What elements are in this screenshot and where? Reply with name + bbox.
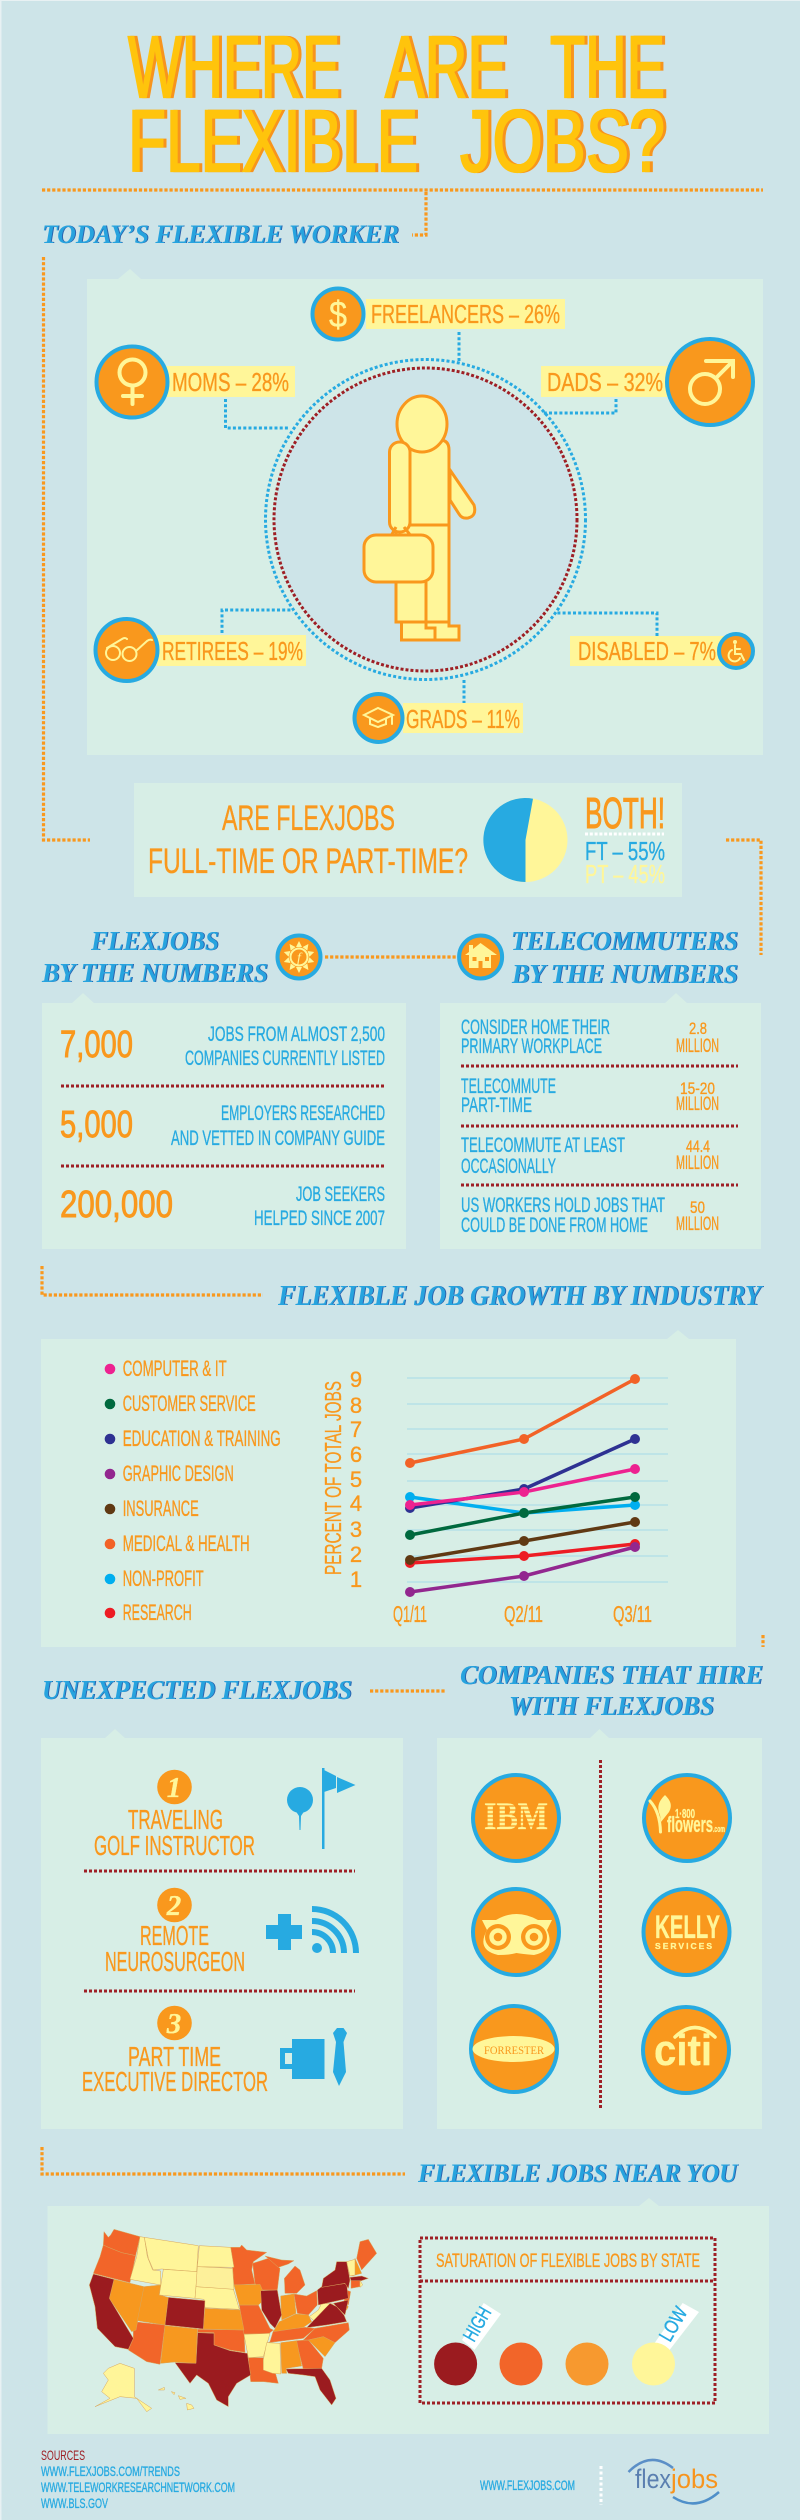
logo: flexjobs: flex [635, 2464, 671, 2494]
row: part-time [461, 1075, 719, 1117]
panel: unexpected flexjobs [41, 1729, 403, 2129]
tag: low: LOW [655, 2303, 692, 2346]
tag: high [459, 2303, 501, 2350]
logo: citi: citi [654, 2026, 712, 2075]
stat: 7,000 jobs: JOBS FROM ALMOST 2,500 [208, 1023, 385, 1046]
heading: telecommuters by the numbers: TELECOMMUTERS [511, 926, 738, 956]
label: moms [96, 346, 295, 418]
line chart: 9 [350, 1367, 362, 1392]
row: part-time: PART-TIME [461, 1094, 532, 1117]
logo: flexjobs [628, 2460, 719, 2503]
line chart: 6 [350, 1442, 362, 1467]
item 2: remote neurosurgeon: REMOTE [140, 1920, 209, 1951]
sources: WWW.FLEXJOBS.COM/TRENDS [41, 2463, 180, 2479]
stat: 200,000 job seekers: HELPED SINCE 2007 [254, 1207, 385, 1230]
legend: MEDICAL & HEALTH [123, 1531, 250, 1556]
legend [105, 1356, 281, 1625]
row: occasionally: TELECOMMUTE AT LEAST [461, 1134, 625, 1157]
heading: telecommuters by the numbers: BY THE NUMBERS [511, 959, 738, 989]
both stats [585, 789, 665, 889]
label: freelancers: FREELANCERS – 26% [371, 299, 560, 329]
label: grads: GRADS – 11% [406, 704, 520, 734]
logo: citi [643, 2007, 729, 2093]
legend: RESEARCH [123, 1600, 192, 1625]
line chart: Q1/11 [393, 1601, 427, 1627]
connector: near you heading [42, 2147, 405, 2174]
stat: 200,000 job seekers [60, 1183, 385, 1230]
logo: Kelly Services: KELLY [655, 1909, 720, 1945]
item 1: golf instructor: TRAVELING [128, 1804, 223, 1835]
row: could be done from home: 50 [690, 1198, 705, 1217]
figure: worker with briefcase [364, 396, 475, 640]
logo: 1-800-flowers: flowers [667, 1812, 713, 1837]
item 2: remote neurosurgeon: 2 [166, 1890, 181, 1922]
logo: Kelly Services: SERVICES [655, 1941, 712, 1951]
map: saturation by state [89, 2229, 377, 2412]
panel: flexjobs by the numbers [42, 993, 406, 1249]
stat: 5,000 employers [60, 1102, 385, 1150]
item 1: golf instructor [94, 1768, 356, 1861]
tag: high: HIGH [459, 2303, 496, 2346]
title: JOBS? [460, 93, 665, 190]
legend: EDUCATION & TRAINING [123, 1426, 281, 1451]
row: part-time: MILLION [676, 1094, 719, 1115]
heading: companies that hire with flexjobs [460, 1660, 763, 1721]
line chart: 4 [350, 1491, 362, 1516]
row: could be done from home: COULD BE DONE FROM HOME [461, 1214, 648, 1237]
heading: flexjobs by the numbers: FLEXJOBS [90, 926, 219, 956]
stat: 7,000 jobs [60, 1023, 385, 1070]
legend: GRAPHIC DESIGN [123, 1461, 234, 1486]
central circle [266, 360, 586, 680]
footer url: WWW.FLEXJOBS.COM [480, 2477, 575, 2493]
title: WHERE [128, 19, 340, 116]
footer divider [600, 2466, 602, 2505]
logo: 1-800-flowers: 1·800 [675, 1806, 695, 1821]
stat: 5,000 employers: 5,000 [60, 1104, 133, 1146]
logo: Forrester: FORRESTER [484, 2043, 544, 2057]
panel: companies that hire [437, 1729, 762, 2129]
connector: numbers to growth heading [42, 1266, 263, 1295]
label: dads [541, 339, 753, 425]
item 3: part time executive director [82, 2006, 347, 2097]
item 1: golf instructor: 1 [167, 1772, 181, 1804]
title: ARE [385, 19, 507, 116]
label: grads [354, 694, 523, 742]
row: occasionally: OCCASIONALLY [461, 1155, 556, 1178]
icon: flexjobs sun [278, 936, 320, 978]
logo: IBM [473, 1775, 559, 1861]
heading: flexjobs by the numbers [41, 926, 268, 988]
line chart: 2 [350, 1542, 362, 1567]
title [128, 19, 665, 190]
panel: growth by industry [41, 1330, 736, 1647]
line chart: 8 [350, 1393, 362, 1418]
question text: FULL-TIME OR PART-TIME? [148, 842, 468, 881]
panel: telecommuters by the numbers [440, 993, 761, 1249]
logo: 1-800-flowers: .com [713, 1824, 725, 1834]
connector: title to first heading [42, 190, 763, 235]
legend: INSURANCE [123, 1496, 199, 1521]
label: retirees: RETIREES – 19% [162, 636, 303, 666]
heading: companies that hire with flexjobs: WITH FLEXJOBS [509, 1691, 714, 1721]
connector: both panel to numbers [726, 840, 761, 955]
row: primary workplace: MILLION [676, 1036, 719, 1057]
row: part-time: 15-20 [680, 1079, 715, 1098]
line chart: 5 [350, 1467, 362, 1492]
connector: sun to house [325, 955, 457, 959]
stat: 7,000 jobs: COMPANIES CURRENTLY LISTED [185, 1047, 385, 1070]
heading: flexjobs by the numbers: BY THE NUMBERS [41, 958, 268, 988]
stat: 200,000 job seekers: JOB SEEKERS [296, 1183, 385, 1206]
heading: telecommuters by the numbers [511, 926, 738, 989]
label: moms: MOMS – 28% [172, 367, 289, 397]
title: FLEXIBLE [128, 93, 418, 190]
label: freelancers [312, 288, 565, 340]
logo: flexjobs: jobs [670, 2464, 718, 2494]
blue connector lines [222, 332, 657, 703]
line chart: PERCENT OF TOTAL JOBS [320, 1381, 346, 1575]
row: occasionally [461, 1134, 719, 1178]
icon: golf ball and flags [287, 1768, 356, 1849]
row: primary workplace: PRIMARY WORKPLACE [461, 1035, 602, 1058]
logo: Forrester [471, 2006, 557, 2092]
sources: WWW.TELEWORKRESEARCHNETWORK.COM [41, 2479, 235, 2495]
sources: WWW.BLS.GOV [41, 2495, 108, 2511]
panel: full-time or part-time [134, 783, 682, 897]
legend: saturation [420, 2238, 715, 2403]
both stats: BOTH! [585, 789, 665, 838]
question text: ARE FLEXJOBS [222, 799, 395, 838]
logo: 1-800-flowers [644, 1775, 730, 1861]
legend: NON-PROFIT [123, 1566, 204, 1591]
line chart: 3 [350, 1517, 362, 1542]
stat: 5,000 employers: EMPLOYERS RESEARCHED [221, 1102, 385, 1125]
both stats: FT – 55% [585, 836, 665, 866]
item 2: remote neurosurgeon: NEUROSURGEON [105, 1946, 245, 1977]
icon: flexjobs sun: f [297, 951, 303, 966]
row: part-time: TELECOMMUTE [461, 1075, 556, 1098]
heading: today's flexible worker: TODAY’S FLEXIBLE WORKER [42, 220, 399, 249]
connector: left side to both panel [44, 257, 90, 840]
line chart: Q2/11 [504, 1601, 543, 1627]
stat: 200,000 job seekers: 200,000 [60, 1184, 173, 1226]
label: dads: DADS – 32% [547, 367, 663, 397]
item 2: remote neurosurgeon [105, 1888, 356, 1977]
row: could be done from home: MILLION [676, 1214, 719, 1235]
row: occasionally: MILLION [676, 1153, 719, 1174]
row: primary workplace: CONSIDER HOME THEIR [461, 1016, 610, 1039]
item 3: part time executive director: EXECUTIVE DIRECTOR [82, 2066, 268, 2097]
row: occasionally: 44.4 [686, 1137, 710, 1156]
label: retirees [96, 619, 306, 681]
line chart: Q3/11 [613, 1601, 652, 1627]
item 3: part time executive director: 3 [166, 2008, 181, 2040]
item 1: golf instructor: GOLF INSTRUCTOR [94, 1830, 255, 1861]
icon: cross and signal [266, 1909, 356, 1953]
label: freelancers: $ [329, 294, 347, 335]
logo: tripadvisor owl [473, 1889, 559, 1975]
heading: flexible jobs near you: FLEXIBLE JOBS NEAR YOU [417, 2159, 738, 2188]
stat: 5,000 employers: AND VETTED IN COMPANY GUIDE [171, 1127, 385, 1150]
panel: today's flexible worker [87, 269, 763, 755]
logo: Kelly Services [644, 1889, 730, 1975]
heading: companies that hire with flexjobs: COMPANIES THAT HIRE [460, 1660, 763, 1690]
panel: flexible jobs near you [48, 2198, 769, 2434]
row: could be done from home [461, 1194, 719, 1237]
icon: telecommuter house [459, 936, 502, 978]
label: disabled: DISABLED – 7% [578, 636, 716, 666]
heading: unexpected flexjobs: UNEXPECTED FLEXJOBS [42, 1675, 352, 1705]
item 3: part time executive director: PART TIME [128, 2041, 221, 2072]
line chart: 1 [350, 1567, 362, 1592]
logo: IBM: IBM [484, 1795, 548, 1838]
sources [41, 2447, 235, 2511]
title: THE [550, 19, 665, 116]
question text [148, 799, 468, 881]
icon: briefcase and tie [280, 2028, 347, 2086]
row: primary workplace [461, 1016, 719, 1058]
connector: unexpected to companies [370, 1689, 445, 1693]
sources: SOURCES [41, 2447, 85, 2463]
row: could be done from home: US WORKERS HOLD JOBS THAT [461, 1194, 665, 1217]
pie chart [483, 798, 568, 882]
connector: growth panel to companies [761, 1635, 765, 1647]
heading: flexible job growth by industry: FLEXIBLE JOB GROWTH BY INDUSTRY [277, 1280, 763, 1312]
both stats: PT – 45% [585, 859, 665, 889]
legend: CUSTOMER SERVICE [123, 1391, 256, 1416]
line chart: 7 [350, 1417, 362, 1442]
stat: 7,000 jobs: 7,000 [60, 1024, 133, 1066]
row: primary workplace: 2.8 [689, 1019, 707, 1038]
legend: COMPUTER & IT [123, 1356, 227, 1381]
line chart [320, 1367, 668, 1627]
